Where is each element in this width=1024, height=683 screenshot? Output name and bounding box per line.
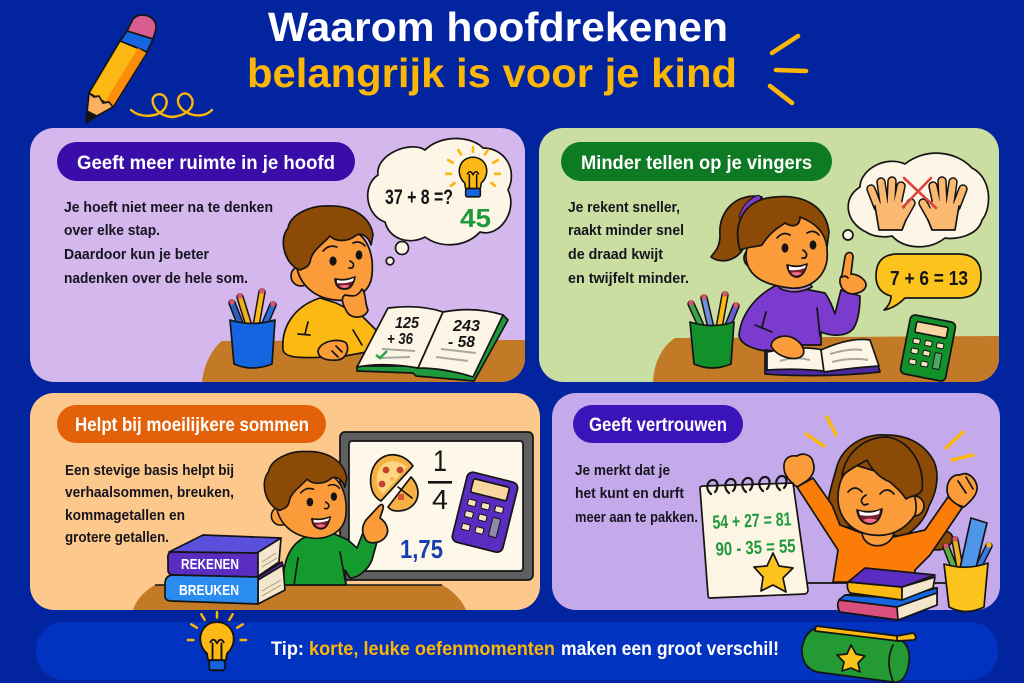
panel: Helpt bij moeilijkere sommen <box>30 393 540 610</box>
icon: tip light bulb <box>188 612 246 670</box>
open book with sums: 125 <box>395 315 420 332</box>
body text: meer aan te pakken. <box>575 510 698 526</box>
thought cloud with crossed hands <box>843 153 989 247</box>
thought cloud with sum and bulb <box>368 138 511 265</box>
tip text: korte, leuke oefenmomenten <box>309 638 555 660</box>
thought cloud with sum and bulb: 45 <box>460 203 491 233</box>
number 1,75: 1,75 <box>400 534 443 564</box>
icon: pencil <box>86 15 156 123</box>
body text: en twijfelt minder. <box>568 271 689 287</box>
celebration rays <box>806 417 973 460</box>
heading pill: Geeft meer ruimte in je hoofd <box>77 152 335 174</box>
girl cheering <box>784 435 977 583</box>
desk <box>202 340 525 382</box>
calculator <box>900 314 956 382</box>
desk <box>133 585 466 610</box>
title <box>247 4 737 96</box>
icon: right hand <box>923 181 963 230</box>
open book with sums <box>357 307 508 381</box>
body text <box>64 200 273 287</box>
body text: grotere getallen. <box>65 530 169 546</box>
icon: pizza <box>371 455 418 511</box>
icon: red cross <box>903 178 936 208</box>
open book with sums: 243 <box>452 318 480 335</box>
thought cloud with sum and bulb: 37 + 8 =? <box>385 186 453 209</box>
stack of books <box>838 568 937 620</box>
open book with sums: + 36 <box>387 331 413 348</box>
speech bubble 7 + 6 = 13: 7 + 6 = 13 <box>890 268 968 290</box>
purple calculator <box>451 471 519 553</box>
body text <box>65 463 234 546</box>
heading pill <box>561 142 832 181</box>
raised fists <box>784 454 977 507</box>
body text: Je merkt dat je <box>575 463 670 479</box>
icon: sparkle lines <box>770 36 806 103</box>
desk <box>653 336 999 382</box>
speech bubble 7 + 6 = 13 <box>876 254 981 310</box>
fraction one quarter: 4 <box>432 484 448 515</box>
heading pill: Helpt bij moeilijkere sommen <box>75 414 309 436</box>
body text: het kunt en durft <box>575 486 684 502</box>
panel: Geeft meer ruimte in je hoofd <box>30 128 525 382</box>
heading pill: Minder tellen op je vingers <box>581 152 812 174</box>
body text: nadenken over de hele som. <box>64 271 248 287</box>
tip text <box>271 638 779 660</box>
girl pointing up <box>711 196 866 352</box>
icon: left hand <box>871 181 911 230</box>
fraction one quarter <box>428 445 452 515</box>
panel: Geeft vertrouwen <box>552 393 1000 620</box>
open book <box>765 336 880 376</box>
stacked books: BREUKEN <box>179 583 239 599</box>
tip bar <box>36 612 998 682</box>
pencil cup <box>229 288 276 368</box>
stacked books: REKENEN <box>181 557 239 573</box>
heading pill <box>57 405 326 443</box>
whiteboard <box>340 432 533 580</box>
pencil cup <box>688 291 739 368</box>
body text: Daardoor kun je beter <box>64 247 209 263</box>
body text: de draad kwijt <box>568 247 663 263</box>
heading pill <box>573 405 743 443</box>
heading pill <box>57 142 355 181</box>
icon: light bulb <box>446 147 500 197</box>
decorative squiggle <box>131 93 212 117</box>
fraction one quarter: 1 <box>433 445 447 478</box>
title: Waarom hoofdrekenen <box>268 4 728 50</box>
panel: Minder tellen op je vingers <box>539 128 999 382</box>
body text: verhaalsommen, breuken, <box>65 485 234 501</box>
title: belangrijk is voor je kind <box>247 50 737 96</box>
body text: Een stevige basis helpt bij <box>65 463 234 479</box>
stacked books <box>165 535 285 604</box>
body text <box>568 200 689 287</box>
boy thinking <box>283 206 388 360</box>
tip text: Tip: <box>271 638 304 660</box>
body text: Je rekent sneller, <box>568 200 680 216</box>
open book with sums: - 58 <box>448 334 475 351</box>
body text <box>575 463 698 526</box>
pencil cup with ruler <box>943 518 992 612</box>
heading pill: Geeft vertrouwen <box>589 414 727 436</box>
body text: Je hoeft niet meer na te denken <box>64 200 273 216</box>
notepad with sums: 90 - 35 = 55 <box>715 536 796 561</box>
body text: kommagetallen en <box>65 508 185 524</box>
notepad with sums <box>700 476 808 598</box>
icon: pencil case <box>802 626 916 682</box>
body text: raakt minder snel <box>568 223 684 239</box>
body text: over elke stap. <box>64 223 160 239</box>
notepad with sums: 54 + 27 = 81 <box>712 509 792 534</box>
boy pointing at board <box>264 451 388 585</box>
tip text: maken een groot verschil! <box>561 638 779 660</box>
icon: star <box>754 553 793 592</box>
desk line <box>805 582 950 584</box>
